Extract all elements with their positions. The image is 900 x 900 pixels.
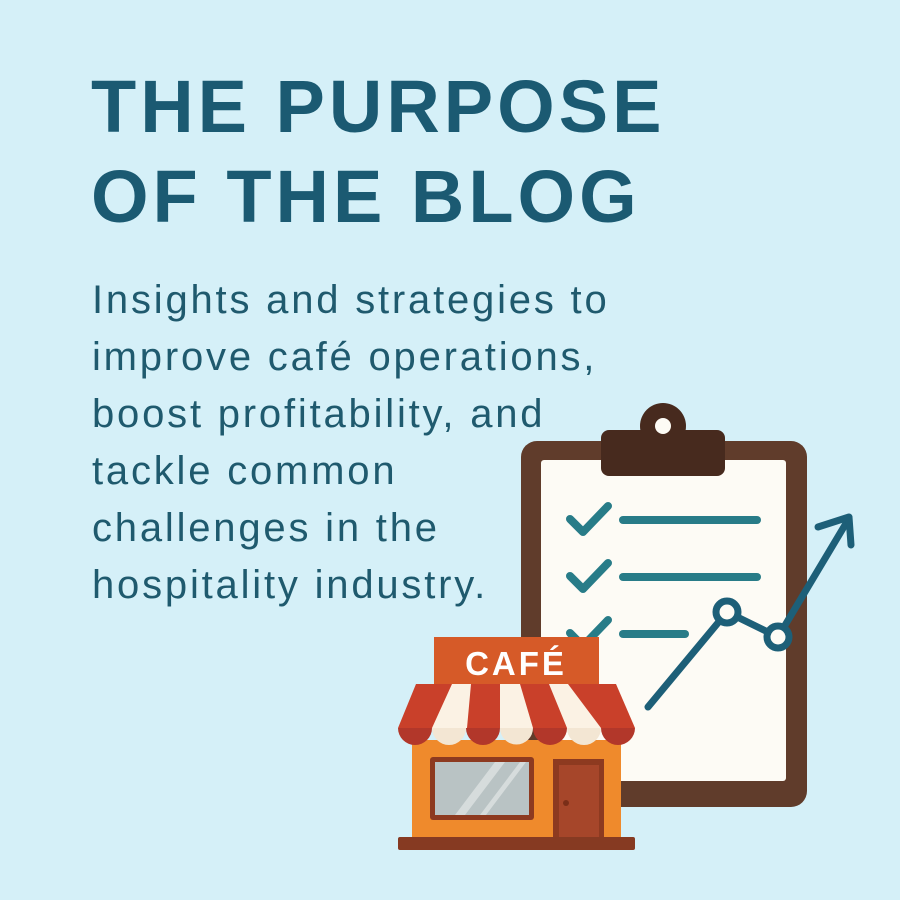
title: OF THE BLOG: [91, 155, 641, 238]
text block: description: [92, 278, 610, 607]
icon: cafe storefront: [398, 637, 635, 850]
text block: description: Insights and strategies to: [92, 278, 610, 322]
chart: trend arrow: [648, 517, 851, 707]
text block: description: tackle common: [92, 449, 397, 493]
cafe sign: CAFÉ: [465, 645, 567, 682]
text block: description: hospitality industry.: [92, 563, 488, 607]
title: THE PURPOSE: [91, 65, 665, 148]
title: [91, 65, 665, 238]
text block: description: challenges in the: [92, 506, 440, 550]
awning: [398, 684, 635, 745]
text block: description: boost profitability, and: [92, 392, 545, 436]
text block: description: improve café operations,: [92, 335, 597, 379]
cafe sign: [434, 637, 599, 684]
icon: clipboard: [521, 403, 807, 807]
